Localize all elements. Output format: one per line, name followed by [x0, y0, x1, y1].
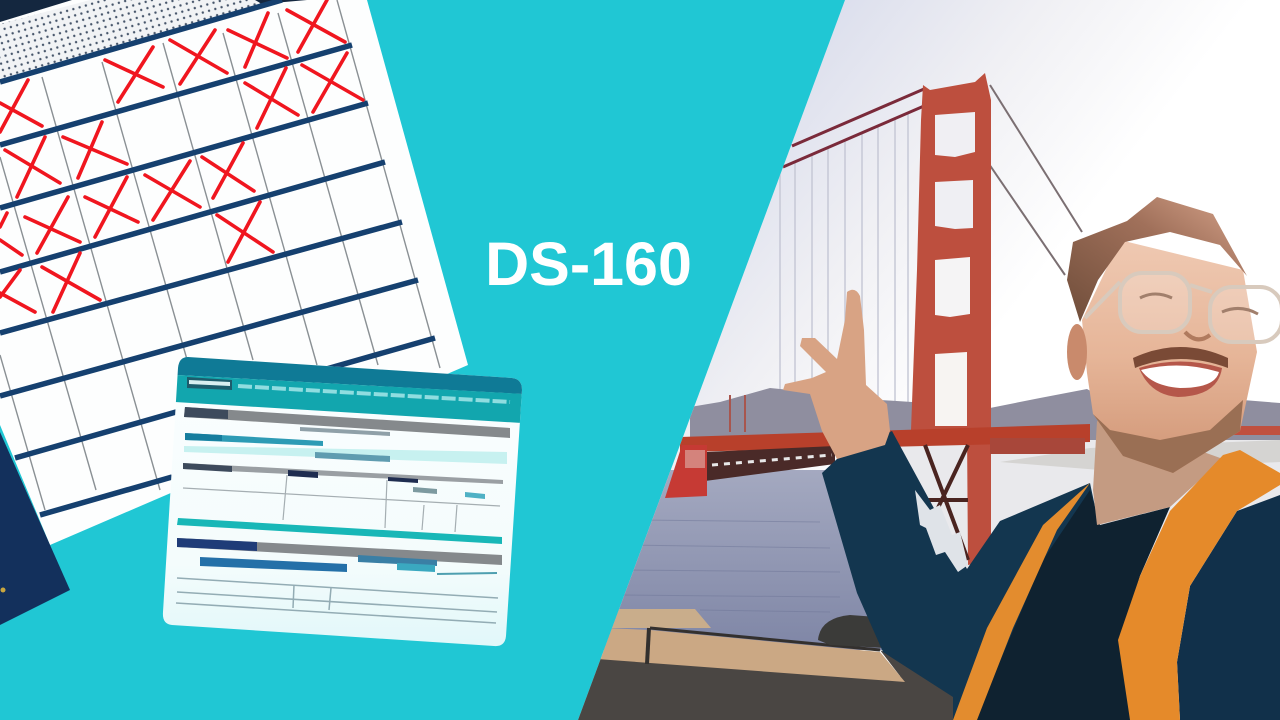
hair [1067, 197, 1247, 322]
red crosses [0, 0, 363, 312]
application form [155, 350, 530, 655]
sleeve highlights [915, 490, 968, 572]
head [1082, 240, 1257, 473]
mouth [1133, 347, 1228, 397]
passport [0, 432, 70, 625]
right jacket [1177, 495, 1280, 720]
eyes [1140, 294, 1258, 314]
ear [1067, 324, 1087, 380]
title: DS-160 [485, 230, 692, 298]
neck [1093, 421, 1223, 525]
backpack straps [1118, 450, 1280, 720]
hand [783, 290, 890, 459]
black shirt [975, 490, 1170, 720]
jacket and sleeve [822, 431, 1130, 720]
rock [818, 615, 885, 648]
photo: traveller at Golden Gate Bridge [570, 0, 1280, 720]
suspension hangers [780, 112, 908, 430]
man [783, 197, 1280, 720]
sky [570, 0, 1280, 720]
pier wall [575, 650, 965, 720]
beard [1093, 400, 1243, 473]
checklist paper [0, 0, 468, 545]
mountains [690, 388, 1280, 445]
nose shadow [1185, 332, 1210, 339]
water [604, 470, 882, 650]
dotted header [0, 0, 282, 82]
golden gate bridge [665, 73, 1280, 565]
glasses [1085, 273, 1280, 342]
